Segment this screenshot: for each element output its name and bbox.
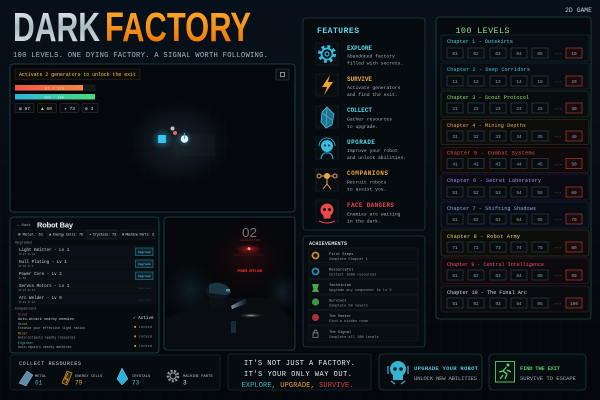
companions list bbox=[15, 306, 154, 349]
chapter 8: 71 bbox=[452, 246, 458, 251]
flashlight beam bbox=[231, 298, 248, 309]
feature: survive: SURVIVE bbox=[347, 76, 372, 83]
chapter 2: 11 bbox=[452, 80, 458, 85]
chapter 10: Chapter 10 - The Final Arc bbox=[447, 290, 527, 296]
subtitle: 100 LEVELS. ONE DYING FACTORY. A SIGNAL WORTH FOLLOWING. bbox=[13, 52, 268, 60]
achievement: survivor: Survivor bbox=[329, 298, 347, 304]
companions list: Companions bbox=[15, 306, 37, 312]
chapter 4: 40 bbox=[571, 135, 577, 140]
chapter 7: 70 bbox=[571, 218, 577, 223]
features heading: FEATURES bbox=[317, 27, 359, 36]
chapter 8 bbox=[441, 230, 589, 256]
feature: collect: to upgrade. bbox=[347, 124, 378, 130]
chapter 2: 20 bbox=[571, 80, 577, 85]
upgrades list: Servos Motors - Lv 1 bbox=[19, 285, 70, 289]
chapter 1: 02 bbox=[473, 52, 479, 57]
health bar: 97 / 115 bbox=[45, 86, 64, 91]
icon: exit sign bbox=[496, 362, 514, 382]
chapter 8: 75 bbox=[537, 246, 543, 251]
chapter 2: 13 bbox=[495, 80, 501, 85]
companions list: Engineer bbox=[18, 341, 33, 345]
player robot bbox=[176, 131, 192, 147]
feature: survive bbox=[316, 74, 401, 98]
panel: robot bay bbox=[10, 217, 159, 353]
resource: crystals: 73 bbox=[132, 380, 140, 386]
chapter 7: 65 bbox=[537, 218, 543, 223]
chapter 4: ··· bbox=[554, 135, 562, 140]
chapter 8: 80 bbox=[571, 246, 577, 251]
lit floor bbox=[237, 313, 265, 318]
chapter 8: ··· bbox=[554, 246, 562, 251]
upgrades list: Power Core - Lv 2 bbox=[19, 273, 62, 277]
chapter 6 bbox=[441, 174, 589, 200]
resource: energy cells bbox=[62, 371, 103, 386]
chapter 5: 44 bbox=[516, 162, 522, 168]
chapter 9: Chapter 9 - Central Intelligence bbox=[447, 262, 544, 268]
resource: energy cells: 79 bbox=[75, 380, 83, 386]
feature: companions: to assist you. bbox=[347, 186, 386, 192]
stat pills: ⚙ 3 bbox=[85, 106, 94, 112]
chapter 10 bbox=[441, 286, 589, 312]
robot bay heading: Robot Bay bbox=[37, 220, 74, 230]
callout: upgrade your robot: UPGRADE YOUR ROBOT bbox=[414, 365, 479, 372]
chapter 9: 81 bbox=[452, 274, 458, 279]
resource chips: ⚙ Machine Parts: 3 bbox=[122, 232, 155, 238]
chapter 7 bbox=[441, 202, 589, 228]
chapter 4: 35 bbox=[537, 135, 543, 140]
chapter 10: 92 bbox=[473, 302, 479, 307]
chapter 5: Chapter 5 - Combat Systems bbox=[447, 150, 535, 156]
feature: companions: COMPANIONS bbox=[347, 170, 388, 177]
resource chips: ✦ Crystals: 73 bbox=[89, 232, 117, 238]
chapter 3: ··· bbox=[554, 107, 562, 112]
chapter 2: 12 bbox=[473, 80, 479, 85]
companions list: Scout bbox=[18, 322, 28, 326]
resource: machine parts bbox=[168, 371, 213, 386]
sector sign bbox=[240, 225, 260, 242]
achievement: technician bbox=[309, 280, 418, 294]
feature: companions bbox=[316, 169, 388, 192]
energy bar bbox=[15, 94, 95, 100]
feature: explore bbox=[316, 43, 403, 66]
callout: find the exit bbox=[489, 354, 586, 390]
chapter 9: 84 bbox=[516, 274, 522, 279]
feature: collect bbox=[316, 106, 392, 130]
title bbox=[13, 4, 251, 50]
companions list: Enhance your effective light radius bbox=[18, 326, 85, 330]
chapter 5: 43 bbox=[495, 162, 501, 168]
feature: face dangers: FACE DANGERS bbox=[347, 202, 394, 209]
chapter 9: 83 bbox=[495, 274, 501, 279]
feature: upgrade: UPGRADE bbox=[347, 139, 375, 146]
upgrades list: M:27 E:17 bbox=[19, 289, 35, 292]
feature: companions: Recruit robots bbox=[347, 180, 387, 186]
chapter 8: 72 bbox=[473, 246, 479, 251]
chapter 3: 24 bbox=[516, 107, 522, 112]
achievement: resourceful bbox=[309, 264, 418, 278]
chapter 6: 51 bbox=[452, 191, 458, 196]
resource chips: ⊞ Metal: 61 bbox=[18, 232, 44, 238]
achievement: the signal: Complete all 100 levels bbox=[329, 335, 379, 340]
chapter 3: 22 bbox=[473, 107, 479, 112]
title: DARK bbox=[13, 4, 100, 50]
resource: machine parts: 3 bbox=[183, 380, 187, 386]
panel: 100 levels bbox=[436, 17, 591, 319]
icon: robot head bbox=[388, 361, 408, 384]
resource: crystals bbox=[117, 368, 151, 386]
achievement: survivor bbox=[309, 295, 418, 310]
chapter 3: 30 bbox=[571, 107, 577, 112]
achievement: survivor: Complete 50 levels bbox=[329, 304, 368, 308]
feature: face dangers: in the dark. bbox=[347, 218, 381, 224]
chapter 8: 73 bbox=[495, 246, 501, 251]
upgrades list: M:27 E:14 bbox=[19, 253, 35, 256]
achievement: the seeker bbox=[309, 310, 418, 325]
chapter 6: 52 bbox=[473, 191, 479, 196]
chapter 8: 74 bbox=[516, 246, 522, 251]
objective banner bbox=[15, 69, 140, 80]
panel: achievements bbox=[303, 236, 425, 347]
chapter 1: ··· bbox=[554, 52, 562, 57]
objective banner: Activate 2 generators to unlock the exit bbox=[19, 72, 136, 78]
achievement: the seeker: The Seeker bbox=[329, 314, 351, 319]
companions list: Auto-attack nearby enemies bbox=[18, 317, 74, 322]
chapter 6: ··· bbox=[554, 191, 562, 196]
chapter 3: 23 bbox=[495, 107, 501, 112]
resource: machine parts: MACHINE PARTS bbox=[183, 375, 213, 379]
chapter 9: 90 bbox=[571, 274, 577, 279]
chapter 4: 33 bbox=[495, 135, 501, 140]
chapter 6: 54 bbox=[516, 191, 522, 196]
companion drones bbox=[170, 126, 177, 135]
tagline call to action: EXPLORE, UPGRADE, SURVIVE. bbox=[242, 382, 354, 390]
title: FACTORY bbox=[105, 4, 251, 50]
panel: game view bbox=[10, 64, 295, 212]
chapter 2: 15 bbox=[537, 80, 543, 85]
generator block bbox=[151, 128, 173, 150]
chapter 10: 95 bbox=[537, 302, 543, 307]
chapter 10: 93 bbox=[495, 302, 501, 307]
achievement: the seeker: Find a hidden room bbox=[329, 319, 368, 324]
chapter 5 bbox=[441, 148, 589, 172]
upgrades list: Arc Welder - Lv 0 bbox=[19, 296, 62, 301]
chapter 4: 32 bbox=[473, 135, 479, 140]
achievement: first steps bbox=[309, 248, 418, 262]
achievement: first steps: First Steps bbox=[329, 252, 353, 257]
feature: upgrade bbox=[316, 137, 406, 161]
chapter 9: ··· bbox=[554, 274, 562, 279]
upgrades list bbox=[15, 240, 156, 304]
resource chips: ▲ Energy Cells: 79 bbox=[49, 232, 84, 238]
resource: energy cells: ENERGY CELLS bbox=[75, 375, 103, 379]
panel: features bbox=[303, 18, 425, 230]
robot silhouette bbox=[206, 282, 231, 318]
chapter 5: ··· bbox=[554, 162, 562, 168]
chapter 9: 85 bbox=[537, 274, 543, 279]
upgrades list: E:56 bbox=[19, 277, 26, 280]
chapter 5: 50 bbox=[571, 162, 577, 168]
stat pills: ▲ 60 bbox=[41, 106, 52, 112]
genre tag: 2D GAME bbox=[565, 7, 592, 14]
achievement: the signal bbox=[309, 326, 418, 341]
chapter 2: 14 bbox=[516, 80, 522, 85]
chapter 2 bbox=[441, 63, 589, 89]
resource chips bbox=[14, 230, 155, 239]
stat pills: ✦ 73 bbox=[64, 106, 75, 112]
chapter 10: 100 bbox=[570, 302, 578, 307]
warning light bbox=[234, 244, 264, 255]
chapter 4: Chapter 4 - Mining Depths bbox=[447, 123, 526, 129]
chapter 1: 01 bbox=[452, 52, 458, 57]
chapter 1: 05 bbox=[537, 52, 543, 57]
achievement: resourceful: Collect 1000 resources bbox=[329, 272, 376, 278]
energy bar: 100 / 100 bbox=[44, 95, 64, 100]
chapter 1 bbox=[441, 35, 589, 61]
chapter 6: Chapter 6 - Secret Laboratory bbox=[447, 178, 541, 184]
chapter 7: ··· bbox=[554, 218, 562, 223]
callout: upgrade your robot: UNLOCK NEW ABILITIES bbox=[414, 375, 478, 382]
health bar bbox=[15, 85, 95, 91]
chapter 3: Chapter 3 - Scout Protocol bbox=[447, 95, 529, 101]
feature: explore: Abandoned factory bbox=[347, 54, 395, 60]
companions list: ■ Locked bbox=[134, 325, 152, 330]
upgrades list: Upgrade bbox=[138, 298, 151, 302]
levels heading: 100 LEVELS bbox=[456, 26, 510, 36]
chapter 5: 41 bbox=[452, 162, 458, 168]
chapter 2: ··· bbox=[554, 80, 562, 85]
chapter 3: 25 bbox=[537, 107, 543, 112]
companions list: ✓ Active bbox=[133, 316, 154, 321]
callout: find the exit: FIND THE EXIT bbox=[520, 365, 561, 372]
stat pills: ⊞ 87 bbox=[19, 106, 30, 112]
companions list: Auto-repairs nearby machines bbox=[18, 345, 72, 349]
achievement: technician: Upgrade any component to Lv 3 bbox=[329, 288, 392, 293]
resource: metal: METAL bbox=[35, 375, 47, 379]
chapter 6: 53 bbox=[495, 191, 501, 196]
achievement: the signal: The Signal bbox=[329, 330, 352, 335]
companions list: Miner bbox=[18, 332, 28, 336]
chapter 1: Chapter 1 - Outskirts bbox=[447, 39, 513, 45]
floor marking bbox=[231, 321, 236, 333]
upgrades list: Upgrade bbox=[138, 262, 151, 266]
chapter 4 bbox=[441, 120, 589, 144]
panel: tagline: IT'S YOUR ONLY WAY OUT. bbox=[244, 371, 352, 379]
chapter 5: 45 bbox=[537, 162, 543, 168]
feature: collect: Gather resources bbox=[347, 116, 392, 122]
upgrades list: M:48 P:14 bbox=[19, 301, 35, 304]
companions list: ■ Locked bbox=[134, 334, 152, 340]
chapter 1: 10 bbox=[571, 52, 577, 57]
stat pills bbox=[15, 104, 98, 112]
chapter 6: 60 bbox=[571, 191, 577, 196]
panel: scene illustration bbox=[164, 216, 300, 350]
upgrades list: M:34 P:7 bbox=[19, 265, 34, 268]
chapter 10: 94 bbox=[516, 302, 522, 307]
chapter 2: Chapter 2 - Deep Corridors bbox=[447, 67, 530, 73]
panel: tagline bbox=[228, 354, 371, 390]
upgrades list: Upgrade bbox=[138, 286, 151, 290]
chapter 1: 03 bbox=[495, 52, 501, 57]
resource: crystals: CRYSTALS bbox=[132, 375, 151, 379]
pause button bbox=[276, 69, 289, 80]
chapter 7: 62 bbox=[473, 218, 479, 223]
feature: survive: Activate generators bbox=[347, 85, 401, 91]
chapter 7: 63 bbox=[495, 218, 501, 223]
feature: upgrade: Improve your robot bbox=[347, 148, 398, 154]
companions list: Auto-collects nearby resources bbox=[18, 336, 75, 340]
chapter 7: Chapter 7 - Shifting Shadows bbox=[447, 206, 536, 212]
upgrades list: Light Emitter - Lv 1 bbox=[19, 248, 70, 253]
chapter 7: 64 bbox=[516, 218, 522, 223]
chapter 5: 42 bbox=[473, 162, 479, 168]
chapter 3: 21 bbox=[452, 107, 458, 112]
feature: collect: COLLECT bbox=[347, 107, 372, 114]
upgrades list: Hull Plating - Lv 1 bbox=[19, 260, 67, 265]
companions list: Scout bbox=[18, 312, 28, 316]
panel: tagline: IT'S NOT JUST A FACTORY. bbox=[244, 360, 355, 368]
sector sign: 02 bbox=[242, 225, 257, 240]
chapter 3 bbox=[441, 91, 589, 117]
panel: collect resources bbox=[10, 355, 220, 390]
feature: explore: EXPLORE bbox=[347, 45, 372, 52]
chapter 10: 91 bbox=[452, 302, 458, 307]
achievement: resourceful: Resourceful bbox=[329, 268, 354, 272]
upgrades list: Upgrade bbox=[138, 274, 151, 278]
achievements heading: ACHIEVEMENTS bbox=[309, 241, 347, 247]
chapter 4: 34 bbox=[516, 135, 522, 140]
resource: metal bbox=[19, 371, 47, 386]
resource: metal: 61 bbox=[35, 380, 43, 386]
feature: upgrade: and unlock abilities. bbox=[347, 155, 406, 161]
chapter 8: Chapter 8 - Robot Army bbox=[447, 234, 520, 240]
chapter 9: 82 bbox=[473, 274, 479, 279]
companions list: ■ Locked bbox=[134, 344, 152, 349]
chapter 4: 31 bbox=[452, 135, 458, 140]
collect heading: COLLECT RESOURCES bbox=[19, 361, 81, 367]
feature: survive: and find the exit. bbox=[347, 92, 398, 98]
achievement: first steps: Complete Chapter 1 bbox=[329, 257, 368, 262]
chapter 7: 61 bbox=[452, 218, 458, 223]
feature: face dangers: Enemies are waiting bbox=[347, 212, 401, 218]
feature: face dangers bbox=[316, 200, 401, 224]
upgrades list: Upgrades bbox=[15, 240, 32, 246]
chapter 9 bbox=[441, 258, 589, 284]
sector sign: GENERATOR bbox=[240, 239, 260, 242]
callout: find the exit: SURVIVE TO ESCAPE bbox=[520, 375, 577, 382]
chapter 6: 55 bbox=[537, 191, 543, 196]
upgrades list: Upgrade bbox=[138, 250, 151, 254]
back link: ← Back bbox=[17, 223, 31, 228]
feature: explore: filled with secrets. bbox=[347, 60, 403, 66]
chapter 1: 04 bbox=[516, 52, 522, 57]
achievement: technician: Technician bbox=[329, 283, 351, 288]
callout: upgrade your robot bbox=[379, 354, 482, 390]
power offline warning: POWER OFFLINE bbox=[238, 270, 262, 274]
chapter 10: ··· bbox=[554, 302, 562, 307]
